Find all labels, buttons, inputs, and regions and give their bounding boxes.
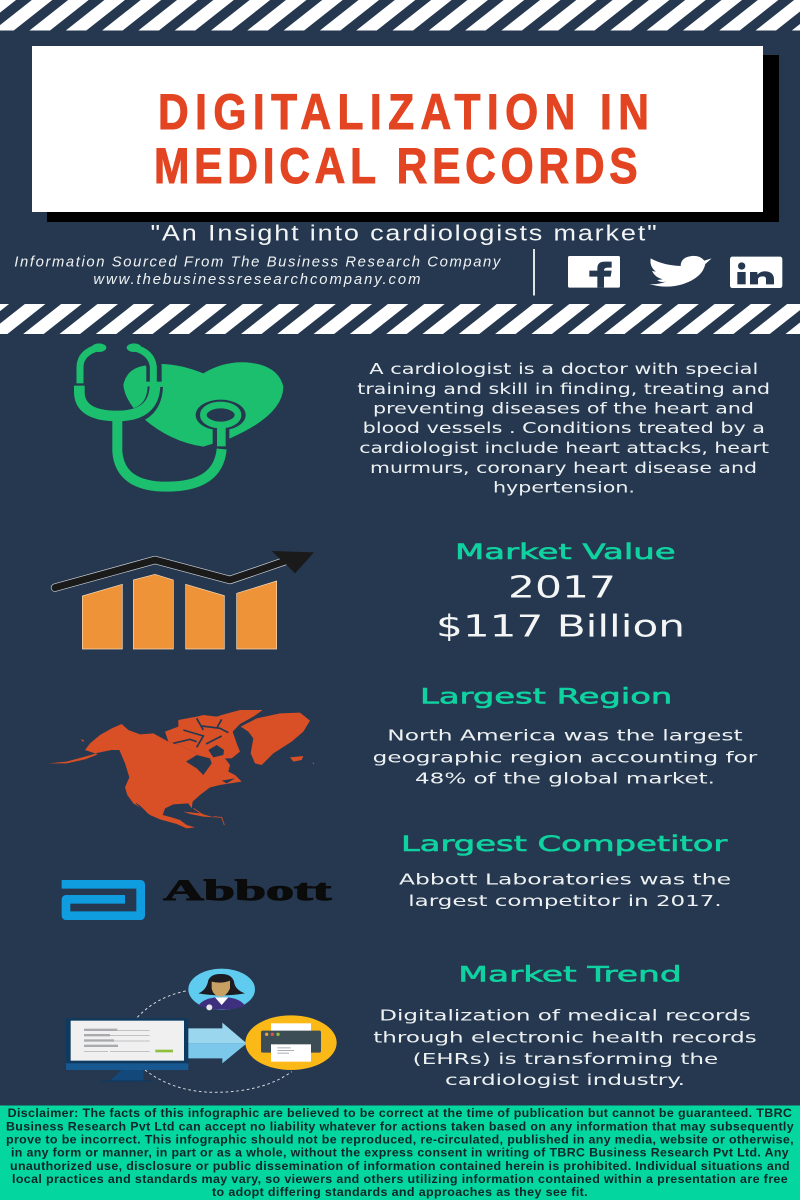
panel: description: hypertension. [493,479,635,497]
source information: Information Sourced From The Business Research Company [14,255,502,271]
panel: largest competitor: largest competitor in 2017. [408,892,722,910]
panel: market value [436,540,685,645]
panel: largest region: 48% of the global market. [415,770,715,788]
panel: disclaimer: local practices and standards may vary, so viewers and others utilizing information contained within a presentation are free [12,1172,788,1186]
panel: largest region: North America was the largest [387,726,743,744]
panel: market value: $117 Billion [436,610,685,645]
panel: market trend: through electronic health records [373,1028,757,1046]
panel: market trend: (EHRs) is transforming the [413,1050,718,1068]
arrow [188,1023,247,1063]
icon: north america map [48,710,314,828]
panel: description: preventing diseases of the heart and [373,400,754,418]
panel: disclaimer: in any form or manner, in part or as a whole, without the express consent in writing of TBRC Business Research Pvt Ltd. Any [11,1146,789,1160]
panel: disclaimer: Disclaimer: The facts of this infographic are believed to be correct at the time of publication but cannot be guaranteed. TBRC [8,1106,792,1120]
panel: market value: 2017 [508,570,616,605]
icon: facebook [568,256,620,288]
panel: market trend: Digitalization of medical records [379,1007,751,1025]
title line 1: DIGITALIZATION IN [158,84,649,140]
panel: disclaimer: Business Research Pvt Ltd can accept no liability whatever for actions taken based on any information that may subsequently [6,1119,794,1133]
panel: largest region: geographic region accounting for [373,748,758,766]
panel: market trend: Market Trend [458,963,682,988]
subtitle: "An Insight into cardiologists market" [150,221,658,246]
printer [245,1015,337,1070]
icon: bar chart with rising arrow [55,551,314,649]
monitor [66,1018,188,1082]
panel: description [357,360,770,497]
panel: description: murmurs, coronary heart disease and [370,459,757,477]
panel: description: A cardiologist is a doctor with special [369,360,758,378]
panel: disclaimer: to adopt differing standards and approaches as they see fit. [212,1185,588,1199]
person [188,969,255,1010]
logo: abbott: Abbott [163,874,331,907]
panel: largest competitor [399,832,731,910]
panel: largest competitor: Abbott Laboratories was the [399,870,731,888]
icon: stethoscope and heart [79,343,283,487]
icon: twitter [649,256,712,287]
title line 2: MEDICAL RECORDS [154,138,638,194]
panel: disclaimer: unauthorized use, disclosure or public dissemination of information contained herein is prohibited. Individual situations and [10,1159,790,1173]
panel: market trend: cardiologist industry. [445,1071,685,1089]
icon: linkedin [730,257,782,288]
panel: description: training and skill in finding, treating and [357,380,770,398]
panel: disclaimer [0,1106,800,1200]
panel: market trend [373,963,757,1089]
panel: description: blood vessels . Conditions treated by a [363,419,765,437]
panel: market value: Market Value [455,540,676,565]
panel: description: cardiologist include heart attacks, heart [359,439,769,457]
panel: largest region [373,685,758,788]
source information [14,255,502,288]
panel: largest competitor: Largest Competitor [401,832,728,857]
source information: www.thebusinessresearchcompany.com [93,272,420,288]
panel: largest region: Largest Region [420,685,672,710]
illustration: electronic health records [66,969,337,1092]
logo: abbott [62,874,331,916]
title panel [32,46,763,212]
panel: disclaimer: prove to be incorrect. This infographic should not be reproduced, re-circulated, published in any media, website or otherwise, [6,1132,794,1146]
